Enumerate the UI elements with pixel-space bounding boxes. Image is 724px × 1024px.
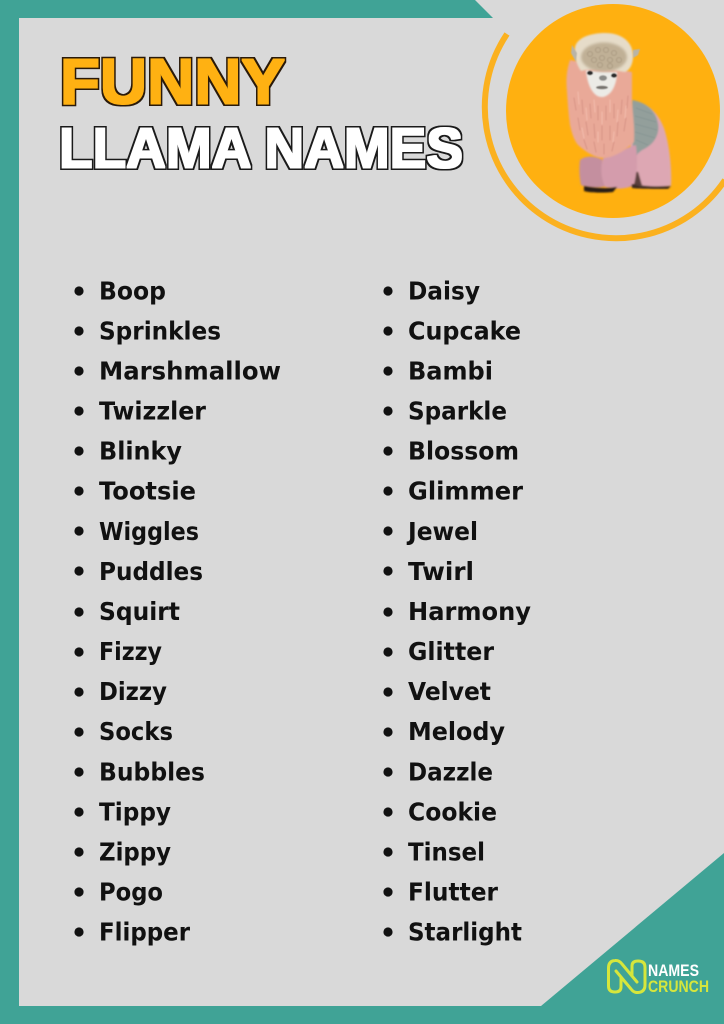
icon: llama illustration <box>566 33 671 193</box>
right column of names: Starlight <box>408 918 522 946</box>
left column of names: Bubbles <box>99 758 205 786</box>
left column of names: Tippy <box>99 798 171 826</box>
right column of names: Twirl <box>408 557 474 586</box>
right column of names: Glimmer <box>408 476 524 506</box>
llama leg gap shadow <box>628 172 642 186</box>
llama ears <box>571 45 640 62</box>
right column of names: Tinsel <box>408 838 485 866</box>
right column of names: Glitter <box>408 637 495 666</box>
left column of names <box>74 276 281 946</box>
left column of names: Puddles <box>99 557 203 586</box>
rear foot shadow <box>632 184 671 189</box>
right column of names: Cupcake <box>408 316 521 346</box>
decorative ring arc <box>485 34 724 238</box>
llama rear body <box>630 104 671 188</box>
right column of names: Blossom <box>408 436 519 466</box>
llama face <box>586 70 617 97</box>
bullets right <box>383 286 393 937</box>
llama fur texture <box>574 96 628 154</box>
logo text: CRUNCH: CRUNCH <box>648 977 709 996</box>
left column of names: Twizzler <box>99 396 207 426</box>
right column of names: Dazzle <box>408 758 493 786</box>
llama feet shadow <box>584 186 617 193</box>
right column of names <box>383 276 531 946</box>
left column of names: Socks <box>99 717 173 746</box>
teal frame: bottom bar with corner triangle <box>19 853 724 1024</box>
llama hat <box>575 33 633 72</box>
left column of names: Dizzy <box>99 677 167 706</box>
left column of names: Squirt <box>99 597 180 626</box>
left column of names: Sprinkles <box>99 316 221 346</box>
left column of names: Zippy <box>99 838 171 866</box>
logo text: NAMES: NAMES <box>648 961 699 980</box>
bullets left <box>74 286 84 937</box>
llama hat wool <box>581 42 627 72</box>
saddle knit texture <box>635 108 657 145</box>
left column of names: Flipper <box>99 918 191 946</box>
right column of names: Sparkle <box>408 396 507 426</box>
light fur highlights <box>578 92 626 142</box>
title <box>59 46 463 180</box>
left column of names: Boop <box>99 276 166 306</box>
right column of names: Melody <box>408 717 505 746</box>
left column of names: Marshmallow <box>99 356 281 386</box>
right column of names: Velvet <box>408 677 491 706</box>
hat wool curls <box>588 48 622 68</box>
title line: LLAMA NAMES: LLAMA NAMES <box>59 116 463 180</box>
right column of names: Bambi <box>408 356 493 386</box>
llama neck fur <box>566 60 634 158</box>
orange circle <box>506 4 720 218</box>
llama eyes and nose <box>587 71 617 89</box>
right column of names: Cookie <box>408 798 497 826</box>
right column of names: Daisy <box>408 276 480 306</box>
left column of names: Fizzy <box>99 637 162 666</box>
right column of names: Jewel <box>406 517 478 546</box>
logo icon: N mark <box>608 960 645 993</box>
llama back leg <box>579 157 606 188</box>
left column of names: Wiggles <box>99 517 199 546</box>
left column of names: Pogo <box>99 878 163 906</box>
right column of names: Harmony <box>408 597 531 626</box>
left column of names: Tootsie <box>99 476 196 506</box>
logo: Names Crunch <box>608 960 709 996</box>
title line: FUNNY: FUNNY <box>60 46 285 118</box>
left column of names: Blinky <box>99 436 182 466</box>
right column of names: Flutter <box>408 878 499 906</box>
llama saddle <box>630 100 658 157</box>
teal frame: left and top bars <box>0 0 493 1024</box>
llama front leg <box>601 145 637 189</box>
